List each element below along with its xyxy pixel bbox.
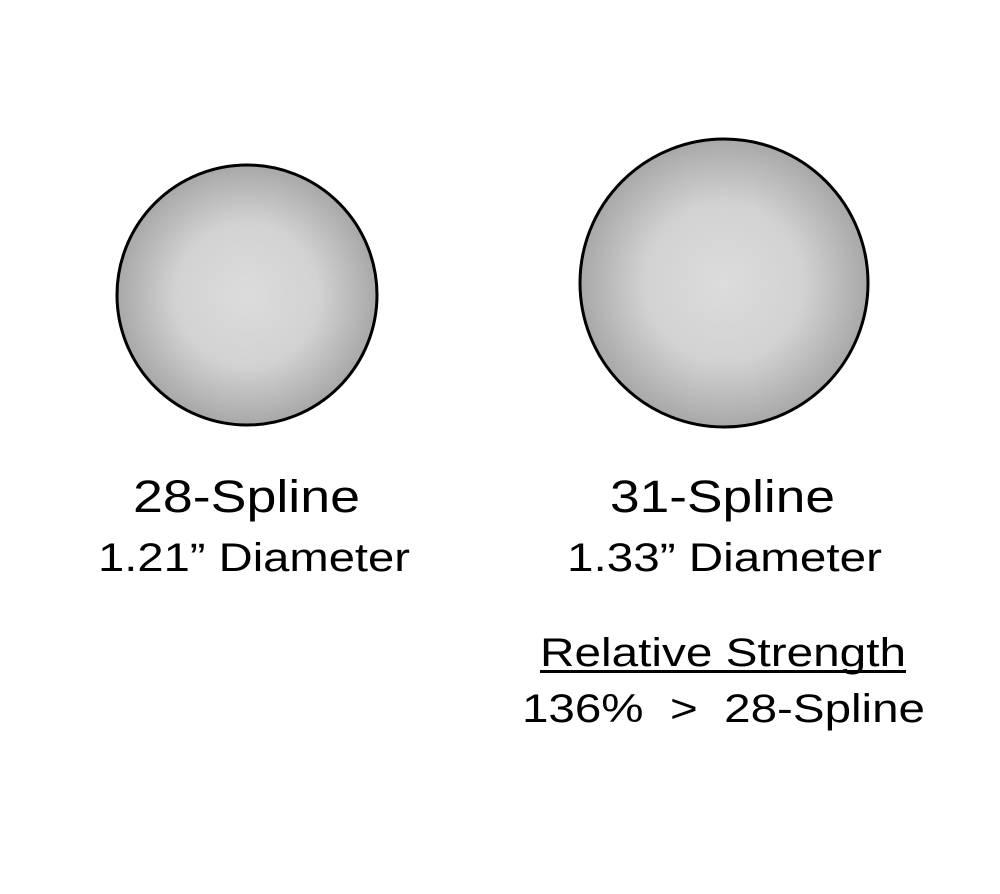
label: 31-spline: 1.33” Diameter	[567, 536, 882, 580]
callout: relative strength: Relative Strength	[540, 631, 906, 675]
callout: relative strength: 136% > 28-Spline	[522, 687, 925, 731]
label: 28-spline: 28-Spline	[133, 471, 360, 522]
label: 31-spline	[567, 471, 882, 580]
label: 28-spline	[98, 471, 410, 580]
circle: 28-spline	[117, 165, 377, 425]
circle: 31-spline	[580, 139, 868, 427]
label: 31-spline: 31-Spline	[610, 471, 835, 522]
label: 28-spline: 1.21” Diameter	[98, 536, 410, 580]
callout: relative strength	[522, 631, 925, 731]
